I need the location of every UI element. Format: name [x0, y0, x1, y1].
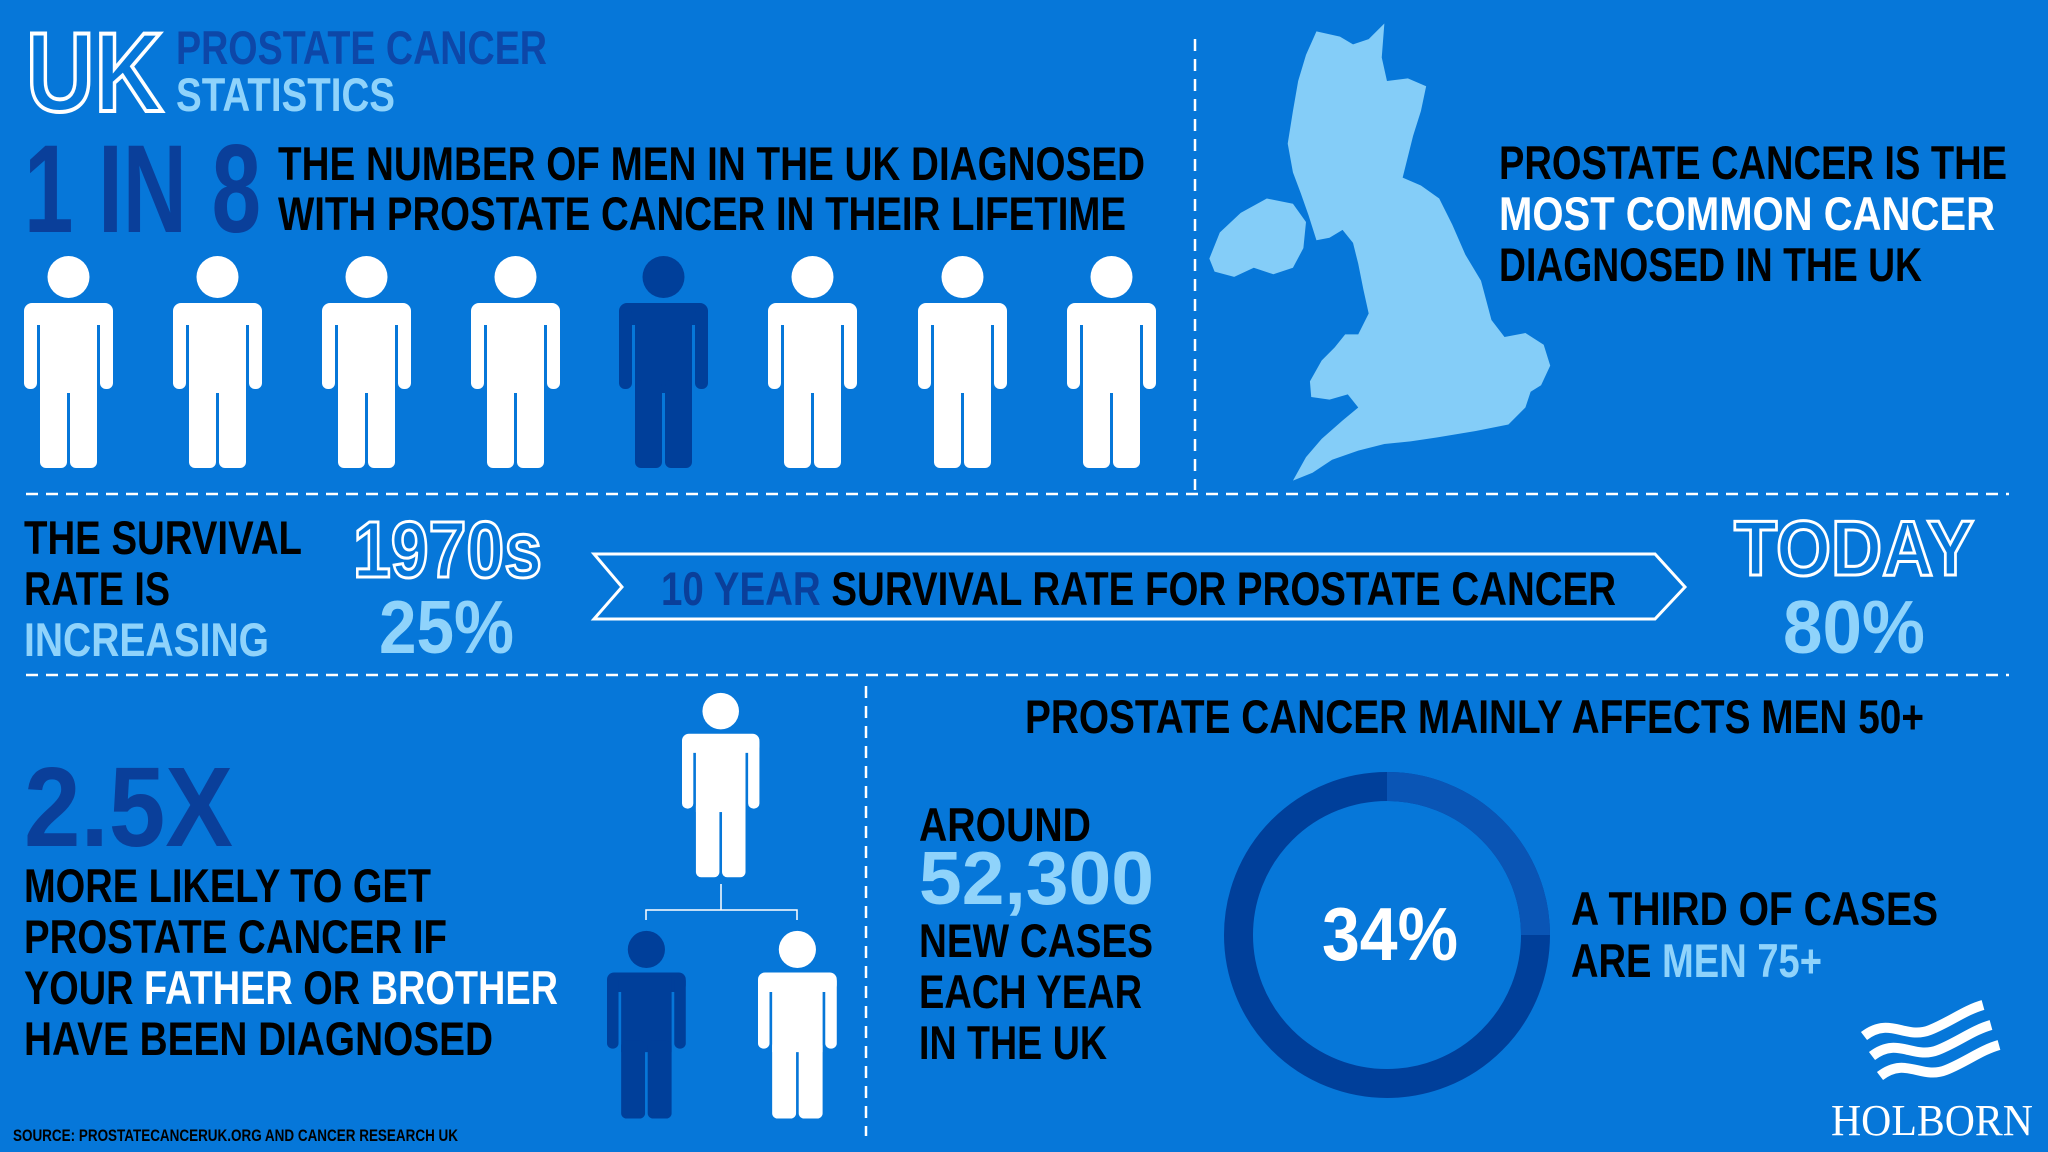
stat: 1970s 25%: 1970s [353, 505, 542, 594]
text: survival rate increasing: THE SURVIVAL [24, 511, 302, 564]
text: survival rate increasing [24, 511, 302, 666]
logo: Holborn [1831, 1005, 2033, 1145]
arrow banner: 10 YEAR SURVIVAL RATE FOR PROSTATE CANCER [661, 562, 1616, 615]
text: third of cases: ARE MEN 75+ [1571, 934, 1822, 987]
stat: 52,300 new cases: 52,300 [919, 836, 1154, 920]
text: third of cases: A THIRD OF CASES [1571, 882, 1938, 935]
map: UK [1209, 24, 1550, 481]
stat: 1 in 8: WITH PROSTATE CANCER IN THEIR LIFETIME [278, 187, 1126, 240]
stat: 1970s 25%: 25% [379, 585, 514, 669]
stat: today 80% [1734, 504, 1974, 669]
stat: 2.5x family: HAVE BEEN DIAGNOSED [24, 1012, 493, 1065]
logo: Holborn: HOLBORN [1831, 1096, 2033, 1145]
stat: 52,300 new cases: EACH YEAR [919, 965, 1142, 1018]
stat: 1 in 8: 1 IN 8 [24, 120, 261, 259]
stat: 52,300 new cases [919, 798, 1154, 1069]
stat: today 80%: 80% [1783, 585, 1925, 669]
stat: today 80%: TODAY [1734, 504, 1974, 592]
title: UK [26, 10, 163, 135]
text: third of cases [1571, 882, 1938, 987]
stat: 1 in 8 [24, 120, 1145, 259]
text: most common cancer: DIAGNOSED IN THE UK [1499, 238, 1922, 291]
title [26, 10, 547, 135]
stat: 1 in 8: THE NUMBER OF MEN IN THE UK DIAGNOSED [278, 137, 1145, 190]
stat: 2.5x family: 2.5X [24, 744, 233, 870]
stat: 2.5x family: PROSTATE CANCER IF [24, 910, 447, 963]
icon row: 8 men [24, 256, 1156, 468]
stat: 52,300 new cases: NEW CASES [919, 914, 1153, 967]
text: most common cancer [1499, 136, 2007, 291]
title: PROSTATE CANCER [176, 21, 547, 74]
text: survival rate increasing: RATE IS [24, 562, 170, 615]
stat: 52,300 new cases: IN THE UK [919, 1016, 1107, 1069]
stat: 2.5x family: MORE LIKELY TO GET [24, 859, 431, 912]
source: SOURCE: PROSTATECANCERUK.ORG AND CANCER RESEARCH UK [13, 1126, 459, 1145]
stat: 1970s 25% [353, 505, 542, 669]
text: survival rate increasing: INCREASING [24, 613, 269, 666]
stat: 2.5x family [24, 744, 558, 1065]
stat: 2.5x family: YOUR FATHER OR BROTHER [24, 961, 558, 1014]
title: STATISTICS [176, 68, 395, 121]
donut chart: 34%: 34% [1322, 892, 1458, 976]
donut chart: 34% [1238, 786, 1536, 1084]
icon: family tree [607, 693, 837, 1119]
stat: 52,300 new cases: AROUND [919, 798, 1091, 851]
